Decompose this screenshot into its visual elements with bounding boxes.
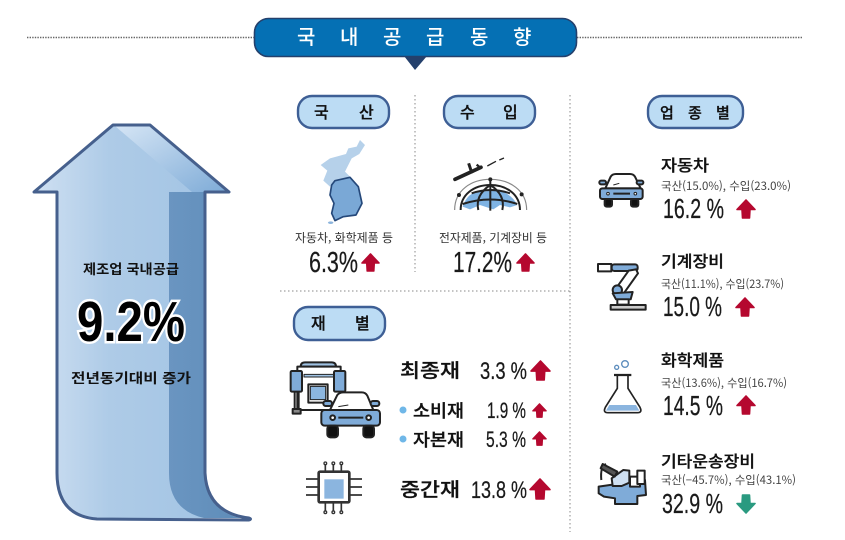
icon: machine and car [291,362,380,437]
arrow down [737,495,755,513]
title banner: 급 [426,21,444,50]
row: intermediate goods: 중간재 [400,475,460,502]
row: other transport equipment [599,448,796,519]
row: capital goods [400,427,546,452]
icon: chip [306,462,362,514]
icon: car [599,174,643,207]
imports caption: 전자제품, 기계장비 등 [439,229,547,246]
row: chemicals: 화학제품 [661,347,724,371]
arrow up [362,254,379,271]
pill: imports [444,96,535,128]
row: consumer goods [400,398,546,423]
row: automobiles: 자동차 [661,152,709,176]
row: machinery: 기계장비 [661,248,724,272]
row: machinery [598,248,784,322]
row: capital goods: 5.3 % [486,427,526,452]
panel: domestic [295,96,393,279]
row: chemicals: 14.5 % [663,390,723,421]
pill: domestic: 산 [359,99,374,123]
pill: by industry: 별 [716,102,730,123]
icon: flask [604,361,641,413]
arrow label bottom: 전년동기대비 증가 [71,367,192,387]
panel: by goods [291,307,550,514]
pill: domestic [298,96,389,128]
title banner [254,18,576,70]
pill: by goods: 재 [311,310,326,334]
icon: korea map [321,140,365,224]
row: consumer goods: 소비재 [413,398,464,423]
row: chemicals [604,347,787,421]
domestic caption: 자동차, 화학제품 등 [295,229,393,246]
row: other transport equipment: 32.9 % [662,488,723,519]
title banner: 국 [297,21,315,50]
row: chemicals: 국산(13.6%), 수입(16.7%) [661,375,787,391]
row: automobiles: 국산(15.0%), 수입(23.0%) [661,178,791,194]
row: machinery: 국산(11.1%), 수입(23.7%) [661,276,784,292]
row: automobiles [599,152,791,224]
icon: robot arm [598,264,646,310]
icon: ship [599,464,646,504]
row: final goods: 3.3 % [480,358,527,385]
row: final goods [400,356,550,385]
title banner: 공 [383,21,401,50]
pill: by goods: 별 [355,310,370,334]
row: automobiles: 16.2 % [663,193,724,224]
imports value: 17.2% [453,247,512,279]
title banner: 내 [340,21,358,50]
icon: plane over globe [455,158,527,211]
domestic value: 6.3% [309,247,358,279]
big up arrow with total [34,125,250,520]
header divider lines [27,36,803,38]
row: other transport equipment: 국산(−45.7%), 수입(43.1%) [661,472,796,488]
pill: by goods [294,307,385,340]
section dividers [280,95,570,532]
panel: by industry [598,96,796,519]
pill: by industry [648,96,743,128]
pill: domestic: 국 [314,99,329,123]
pill: by industry: 업 [660,102,674,123]
arrow value: 9.2% [77,290,185,354]
title banner: 동 [470,21,488,50]
row: intermediate goods [400,475,550,504]
row: capital goods: 자본재 [413,427,464,452]
row: final goods: 최종재 [400,356,460,383]
title banner: 향 [513,21,531,50]
row: machinery: 15.0 % [663,291,722,322]
row: consumer goods: 1.9 % [487,398,526,423]
pill: by industry: 종 [688,102,702,123]
pill: imports: 수 [460,99,475,123]
row: other transport equipment: 기타운송장비 [661,448,755,472]
panel: imports [439,96,547,279]
row: intermediate goods: 13.8 % [471,477,527,504]
arrow label top: 제조업 국내공급 [83,258,179,278]
pill: imports: 입 [503,99,518,123]
arrow up [517,254,534,271]
